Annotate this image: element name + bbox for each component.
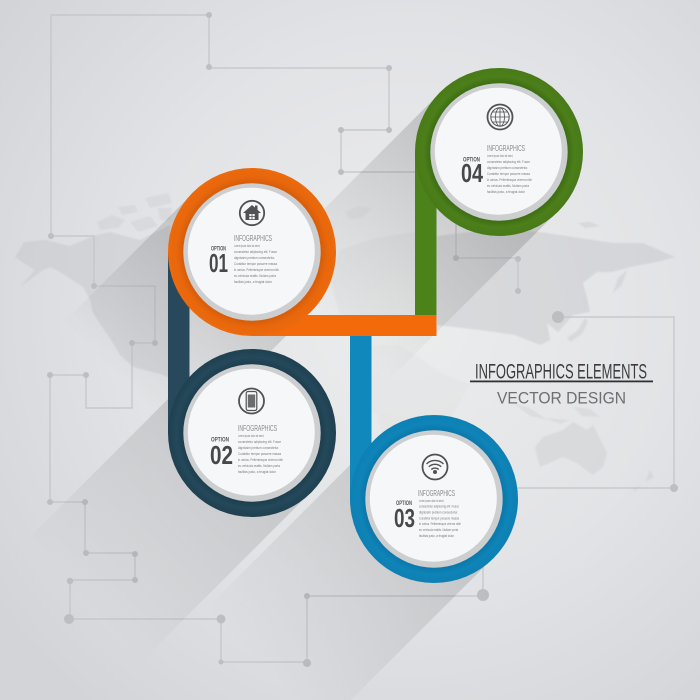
body text 01: Curabitur tempor posuere massa xyxy=(234,261,278,266)
orange connector bar xyxy=(252,315,436,336)
number 02: 02 xyxy=(210,440,233,470)
panel: option 04 xyxy=(430,83,568,221)
option 02 ring and stem xyxy=(168,252,336,517)
body text 03: dignissim pretium consectetur. xyxy=(419,510,458,514)
long shadows xyxy=(23,93,558,700)
body text 02: Lorem ipsum dolor sit amet, xyxy=(238,433,264,438)
body text 03: in varius. Pellentesque viverra nibh xyxy=(419,521,461,526)
option label 03: OPTION xyxy=(396,501,412,507)
map: north america xyxy=(15,225,175,380)
icon: globe xyxy=(488,104,512,130)
navy stem xyxy=(168,252,190,433)
map: indonesia xyxy=(513,403,600,424)
heading 02: INFOGRAPHICS xyxy=(238,423,277,433)
number 03: 03 xyxy=(394,503,415,533)
body text 02 xyxy=(238,433,283,474)
body text 04: consectetur adipiscing elit. Fusce xyxy=(487,159,530,164)
option 03 ring and stem xyxy=(350,330,518,583)
map: new zealand xyxy=(633,470,654,492)
body text 01: consectetur adipiscing elit. Fusce xyxy=(234,249,277,254)
body text 02: in varius. Pellentesque viverra nibh xyxy=(238,457,283,462)
world map xyxy=(15,193,675,492)
body text 01: in varius. Pellentesque viverra nibh xyxy=(234,267,279,272)
body text 01: facilisis justo, a feugiat dolor xyxy=(234,279,273,284)
body text 01: dignissim pretium consectetur. xyxy=(234,255,275,260)
shadow: option 03 xyxy=(205,440,493,700)
shadow: option 02 xyxy=(23,374,311,662)
body text 03: Curabitur tempor posuere massa xyxy=(419,515,460,520)
body text 04: Curabitur tempor posuere massa xyxy=(487,171,531,176)
panel: option 01 xyxy=(183,183,321,321)
icon: house xyxy=(240,201,264,225)
number 04: 04 xyxy=(461,158,483,188)
body text 02: facilisis justo, a feugiat dolor xyxy=(238,469,277,474)
map: africa xyxy=(350,345,470,490)
body text 03: consectetur adipiscing elit. Fusce xyxy=(419,504,459,509)
map: asia xyxy=(437,228,675,345)
title block xyxy=(470,360,653,408)
blue ring xyxy=(350,415,518,583)
heading 01: INFOGRAPHICS xyxy=(234,233,272,243)
body text 02: Curabitur tempor posuere massa xyxy=(238,451,282,456)
body text 01: Lorem ipsum dolor sit amet, xyxy=(234,243,260,248)
heading 04: INFOGRAPHICS xyxy=(487,143,525,153)
panel: option 03 xyxy=(365,430,503,568)
shadow: option 01 xyxy=(63,193,311,441)
option label 02: OPTION xyxy=(211,438,229,444)
navy ring xyxy=(168,349,336,517)
body text 03 xyxy=(419,498,461,538)
heading 03: INFOGRAPHICS xyxy=(418,488,455,498)
body text 04 xyxy=(487,153,532,194)
panel: option 02 xyxy=(183,364,321,502)
blue stem xyxy=(350,330,372,499)
orange ring xyxy=(168,168,336,336)
body text 03: eu vehicula mattis. Nullam porta xyxy=(419,527,459,532)
option label 04: OPTION xyxy=(463,158,480,164)
green stem xyxy=(415,152,436,317)
body text 04: Lorem ipsum dolor sit amet, xyxy=(487,153,513,158)
map: europe xyxy=(330,206,437,325)
option 01 ring and connector xyxy=(168,168,436,336)
title underline xyxy=(470,380,653,382)
body text 01 xyxy=(234,243,279,284)
green ring xyxy=(415,68,583,236)
icon: smartphone xyxy=(239,388,264,414)
icon: wifi xyxy=(422,454,448,480)
body text 02: dignissim pretium consectetur. xyxy=(238,445,279,450)
body text 02: consectetur adipiscing elit. Fusce xyxy=(238,439,281,444)
body text 04: eu vehicula mattis. Nullam porta xyxy=(487,183,530,188)
option label 01: OPTION xyxy=(211,246,226,252)
map: far east islands xyxy=(567,222,627,342)
body text 03: facilisis justo, a feugiat dolor xyxy=(419,533,454,538)
map: australia xyxy=(535,422,607,475)
shadow: option 04 xyxy=(270,93,558,381)
body text 04: facilisis justo, a feugiat dolor xyxy=(487,189,526,194)
option 04 ring and stem xyxy=(415,68,583,317)
body text 01: eu vehicula mattis. Nullam porta xyxy=(234,273,277,278)
body text 04: dignissim pretium consectetur. xyxy=(487,165,528,170)
body text 03: Lorem ipsum dolor sit amet, xyxy=(419,498,444,503)
body text 02: eu vehicula mattis. Nullam porta xyxy=(238,463,281,468)
subtitle: VECTOR DESIGN xyxy=(497,390,626,408)
map: arctic islands xyxy=(97,193,172,232)
number 01: 01 xyxy=(209,248,228,278)
body text 04: in varius. Pellentesque viverra nibh xyxy=(487,177,532,182)
